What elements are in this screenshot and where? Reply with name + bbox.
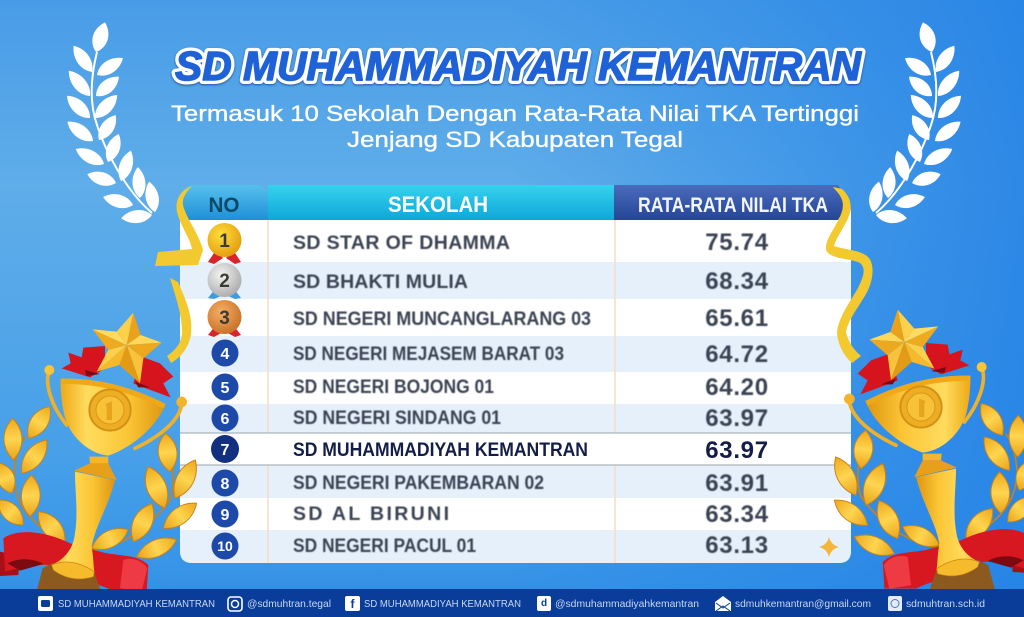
panel: ranking table xyxy=(180,185,851,563)
footer bar xyxy=(0,589,1024,617)
icon: left gold ribbon xyxy=(155,186,203,363)
scores: 75.74 xyxy=(705,229,769,256)
facebook link xyxy=(345,596,521,611)
instagram link: @sdmuhtran.tegal xyxy=(247,598,331,610)
website link: sdmuhtran.sch.id xyxy=(906,598,985,610)
scores: 63.91 xyxy=(705,470,769,497)
table header: SEKOLAH xyxy=(388,192,488,217)
scores: 68.34 xyxy=(705,268,769,295)
tiktok link: @sdmuhammadiyahkemantran xyxy=(555,598,699,610)
school names: SD NEGERI MEJASEM BARAT 03 xyxy=(293,343,564,365)
scores: 63.97 xyxy=(705,405,769,432)
school names: SD AL BIRUNI xyxy=(293,503,449,525)
scores: 64.20 xyxy=(705,374,769,401)
rank medals: 7 xyxy=(221,442,230,459)
scores: 64.72 xyxy=(705,341,769,368)
tiktok link: d xyxy=(541,598,547,609)
rank medals xyxy=(208,223,242,560)
icon: left laurel xyxy=(62,20,161,225)
subtitle xyxy=(171,101,859,152)
table header: RATA-RATA NILAI TKA xyxy=(638,194,828,217)
school names: SD NEGERI SINDANG 01 xyxy=(293,407,501,429)
scores: 63.34 xyxy=(705,501,769,528)
school names: SD NEGERI BOJONG 01 xyxy=(293,376,494,398)
subtitle: Termasuk 10 Sekolah Dengan Rata-Rata Nilai TKA Tertinggi xyxy=(171,101,859,126)
subtitle: Jenjang SD Kabupaten Tegal xyxy=(347,127,683,152)
scores: 63.13 xyxy=(705,532,769,559)
youtube link: SD MUHAMMADIYAH KEMANTRAN xyxy=(58,598,215,610)
school names: SD STAR OF DHAMMA xyxy=(293,232,510,254)
rank medals: 1 xyxy=(219,231,230,252)
email link xyxy=(715,596,871,611)
icon: right laurel xyxy=(867,20,966,225)
rank medals: 9 xyxy=(221,507,230,524)
table header xyxy=(180,185,849,220)
rank medals: 4 xyxy=(221,346,230,363)
scores xyxy=(705,229,769,559)
table header: NO xyxy=(208,194,240,217)
school names: SD NEGERI PACUL 01 xyxy=(293,535,476,557)
youtube link xyxy=(38,596,215,611)
school names: SD BHAKTI MULIA xyxy=(293,271,468,293)
title: SD MUHAMMADIYAH KEMANTRAN xyxy=(175,43,862,89)
school names: SD NEGERI MUNCANGLARANG 03 xyxy=(293,308,591,330)
icon: left trophy xyxy=(0,313,203,593)
rank medals: 3 xyxy=(219,308,230,329)
title: SD MUHAMMADIYAH KEMANTRAN xyxy=(175,43,862,89)
school names: SD MUHAMMADIYAH KEMANTRAN xyxy=(293,439,588,461)
icon: right gold ribbon xyxy=(826,187,873,363)
facebook link: SD MUHAMMADIYAH KEMANTRAN xyxy=(364,598,521,610)
school names: SD NEGERI PAKEMBARAN 02 xyxy=(293,472,544,494)
instagram link xyxy=(228,597,331,611)
facebook link: f xyxy=(350,597,356,611)
email link: sdmuhkemantran@gmail.com xyxy=(735,598,871,610)
rank medals: 5 xyxy=(221,380,230,397)
rank medals: 10 xyxy=(217,538,233,554)
school names xyxy=(293,232,591,557)
scores: 65.61 xyxy=(705,305,769,332)
icon: gold sparkle xyxy=(819,537,839,557)
table rows xyxy=(180,200,851,563)
scores: 63.97 xyxy=(705,437,769,464)
rank medals: 2 xyxy=(219,271,230,292)
icon: right trophy xyxy=(828,310,1024,590)
rank medals: 6 xyxy=(221,411,230,428)
website link xyxy=(888,596,985,611)
rank medals: 8 xyxy=(221,476,230,493)
